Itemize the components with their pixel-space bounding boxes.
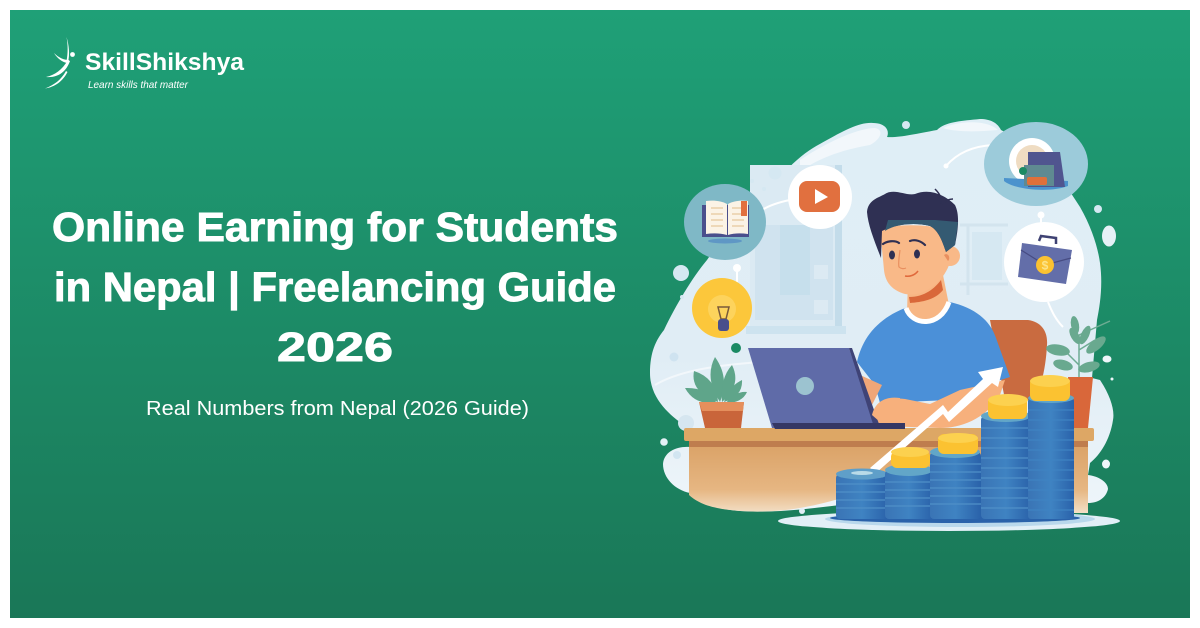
logo (45, 37, 245, 91)
hand (872, 398, 900, 422)
arrow (870, 367, 1003, 473)
title: Online Earning for Students (52, 204, 618, 250)
stack 4 (981, 394, 1031, 519)
icon: light bulb (692, 278, 752, 338)
ear (940, 246, 960, 266)
subtitle: Real Numbers from Nepal (2026 Guide) (146, 398, 529, 420)
chair (990, 320, 1047, 400)
title (52, 204, 618, 370)
right plant (1045, 315, 1110, 428)
collar (906, 302, 949, 322)
background blob (650, 119, 1113, 513)
icon: play button (788, 165, 852, 229)
illustration: freelancer at desk (650, 119, 1120, 531)
stack 2 (885, 447, 933, 519)
stack 1 (836, 468, 888, 519)
person (857, 189, 1010, 428)
icon: bags (984, 122, 1088, 206)
hair (867, 192, 958, 258)
title: in Nepal | Freelancing Guide (54, 264, 616, 310)
brand name: SkillShikshya (85, 49, 245, 76)
neck (907, 275, 950, 325)
icon: open book (684, 184, 766, 260)
icon: briefcase: $ (1042, 258, 1049, 272)
connectors (737, 145, 1063, 327)
window left (746, 165, 846, 334)
desk (684, 428, 1094, 513)
tagline: Learn skills that matter (88, 79, 188, 91)
icon: leaping figure (45, 37, 75, 88)
icon: briefcase (1004, 222, 1084, 302)
laptop (748, 348, 905, 429)
face (880, 225, 950, 295)
title: 2026 (277, 324, 393, 370)
coin platform (778, 511, 1120, 531)
window right (960, 225, 1008, 295)
floating dots (660, 121, 1116, 468)
shirt (857, 302, 1010, 403)
coin stacks (836, 375, 1074, 519)
eyes, brows, nose, smile (889, 250, 895, 260)
left plant (685, 357, 747, 428)
arms (860, 375, 882, 405)
stack 3 (930, 433, 981, 519)
stack 5 (1028, 375, 1074, 519)
